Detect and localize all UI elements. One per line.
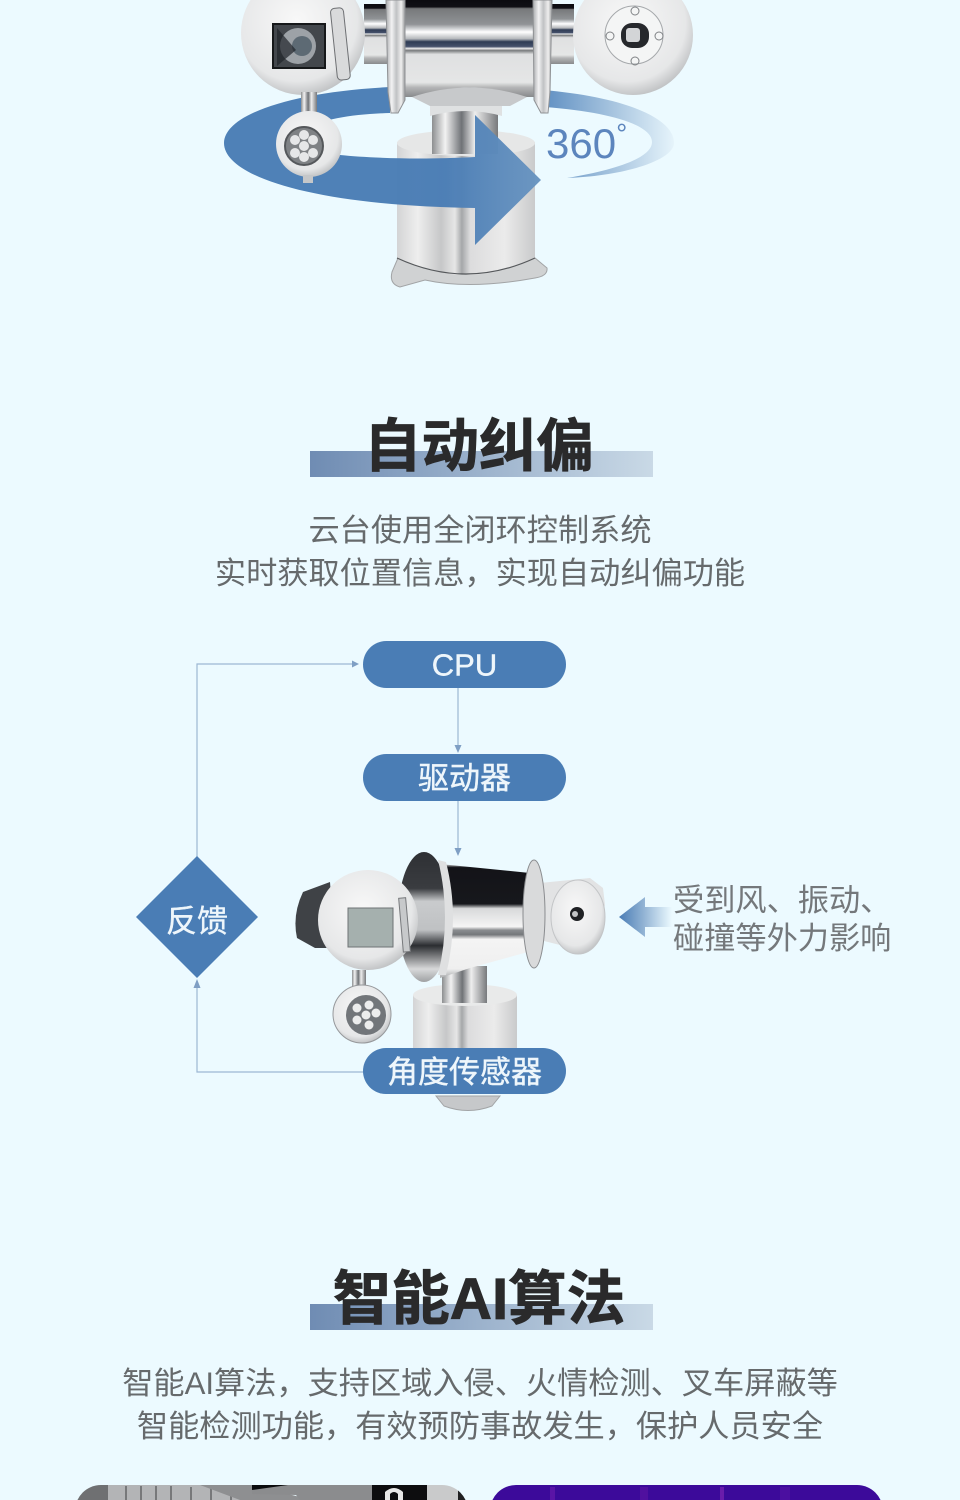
photo: purple thermal image (490, 1485, 883, 1500)
diamond: feedback: 反馈 (166, 904, 228, 939)
pill: driver: 驱动器 (418, 761, 511, 796)
rotation arrow (224, 87, 674, 245)
external force arrow (619, 897, 672, 937)
pill: angle sensor (363, 1048, 566, 1094)
360 degree label: ° (616, 118, 627, 149)
description: AI algorithm: 智能AI算法，支持区域入侵、火情检测、叉车屏蔽等 (122, 1366, 838, 1401)
external force note (673, 883, 891, 956)
pill: driver (363, 754, 566, 801)
connector lines (197, 664, 458, 1072)
external force note: 碰撞等外力影响 (673, 921, 891, 956)
front sphere with lens window (318, 870, 418, 970)
description: auto correction: 实时获取位置信息，实现自动纠偏功能 (215, 556, 745, 591)
mount collar (412, 88, 527, 106)
central body (398, 852, 545, 982)
external force note: 受到风、振动、 (673, 883, 891, 918)
pill: CPU (363, 641, 566, 688)
right sensor housing (573, 0, 693, 95)
rear dark cylinder (295, 882, 335, 948)
description: AI algorithm (122, 1366, 838, 1444)
rear sensor housing (540, 878, 605, 954)
pill: angle sensor: 角度传感器 (387, 1055, 542, 1090)
heading: AI algorithm: 智能AI算法 (333, 1267, 625, 1332)
photo: monochrome detection image (75, 1485, 470, 1500)
closed-loop control diagram (136, 641, 891, 1110)
description: auto correction (215, 513, 745, 591)
pill: CPU: CPU (432, 648, 497, 682)
infrared lamp (333, 970, 391, 1043)
camera main body (364, 0, 574, 113)
camera base cylinder (391, 100, 547, 287)
base cylinder (413, 966, 517, 1110)
illustration: camera with 360 degree rotation arrow (224, 0, 693, 287)
infrared lamp (276, 92, 342, 183)
description: AI algorithm: 智能检测功能，有效预防事故发生，保护人员安全 (137, 1409, 823, 1444)
heading: auto correction: 自动纠偏 (364, 415, 594, 479)
left camera sphere with lens window (241, 0, 365, 95)
diamond: feedback (136, 856, 258, 978)
360 degree label: 360 (546, 120, 616, 167)
description: auto correction: 云台使用全闭环控制系统 (308, 513, 652, 548)
camera photo (295, 852, 605, 1110)
arrowheads (194, 660, 462, 988)
heading: auto correction (310, 415, 653, 479)
